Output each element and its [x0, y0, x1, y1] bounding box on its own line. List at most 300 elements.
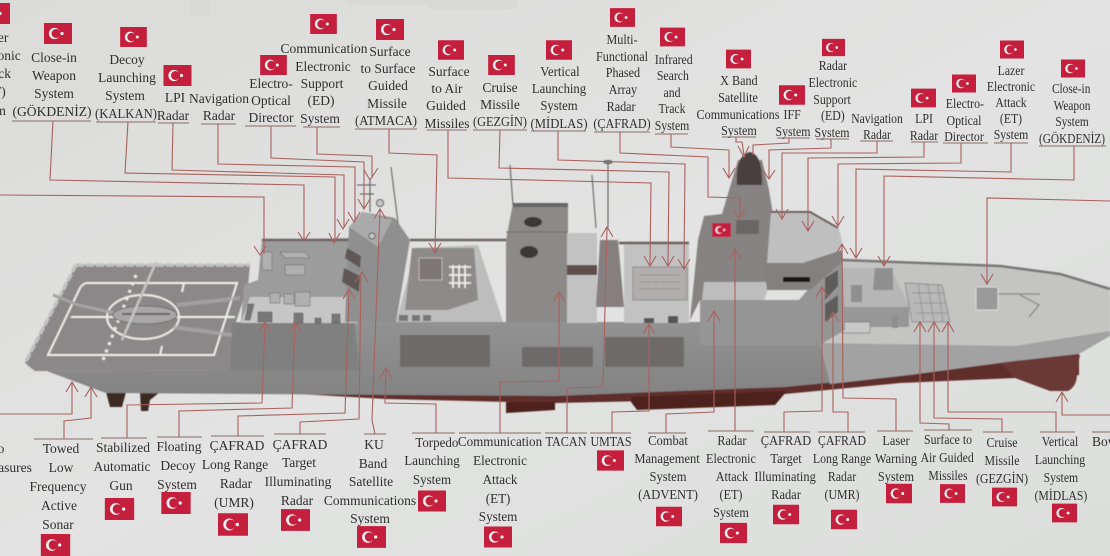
- underline: [211, 435, 264, 437]
- callout: left lazer electronic attack: [0, 3, 266, 255]
- label: Weapon: [1054, 98, 1091, 113]
- main hull: [25, 290, 1110, 396]
- label: Electro-: [946, 96, 984, 111]
- callout: bow sonar: [1056, 392, 1110, 449]
- flag: [911, 89, 936, 107]
- label: Navigation: [851, 111, 903, 126]
- label: Long Range: [813, 451, 872, 466]
- connector: [50, 121, 310, 241]
- label: LPI: [165, 90, 186, 105]
- underline: [994, 142, 1028, 144]
- top page shadow: [190, 0, 517, 16]
- label: Missile: [985, 453, 1020, 468]
- label: Radar: [607, 99, 636, 114]
- underline: [648, 432, 686, 434]
- label: Functional: [596, 49, 648, 64]
- label: Radar: [717, 433, 747, 448]
- label: Stabilized: [96, 440, 150, 455]
- callout: infrared search and track: [655, 28, 735, 178]
- hull boot band: [300, 352, 1079, 403]
- label: System: [157, 477, 197, 492]
- label: Surface to: [924, 432, 972, 447]
- label: (ET): [486, 491, 510, 506]
- label: Director: [249, 110, 294, 125]
- label: Satellite: [718, 90, 758, 105]
- label: Attack: [483, 472, 518, 487]
- connector: [380, 368, 436, 433]
- underline: [860, 140, 893, 142]
- flag: [164, 65, 192, 86]
- callout: close-in weapon: [12, 23, 310, 241]
- underline: [877, 430, 913, 432]
- flag: [831, 510, 857, 529]
- flag: [310, 14, 337, 34]
- hull flag: [712, 223, 731, 237]
- connector: [499, 130, 674, 266]
- flag: [656, 507, 682, 526]
- underline: [983, 431, 1013, 433]
- underline: [101, 437, 147, 439]
- hull side panels: [400, 335, 684, 367]
- connector: [914, 322, 949, 430]
- hangar-top equipment: [262, 252, 310, 306]
- aft vls deck: [624, 243, 689, 323]
- underline: [722, 136, 756, 138]
- underline: [355, 128, 417, 130]
- connector: [784, 287, 828, 432]
- flag: [1000, 40, 1024, 58]
- aft mast block: [345, 212, 410, 322]
- funnel block: [506, 203, 568, 322]
- label: Long Range: [202, 457, 268, 472]
- connector: [218, 124, 360, 222]
- midship mast structure: [596, 240, 624, 307]
- illustration: frigate: [25, 152, 1110, 413]
- connector: [928, 322, 1002, 432]
- label: Attack: [995, 95, 1027, 110]
- label: Air Guided: [921, 450, 974, 465]
- label: Radar: [281, 493, 314, 508]
- callout: vertical launching system: [530, 40, 690, 269]
- label: (KALKAN): [95, 106, 157, 121]
- underline: [427, 129, 467, 131]
- callout: decoy launching: [95, 27, 340, 243]
- flag: [218, 513, 248, 536]
- label: System: [1055, 114, 1089, 129]
- callout: electro-optical director: [245, 55, 370, 209]
- callout: cafrad target illuminating radar right: [754, 287, 828, 524]
- label: Close-in: [31, 50, 77, 65]
- label: System: [1044, 470, 1078, 485]
- label: Close-in: [1052, 81, 1091, 96]
- bow flank: [820, 331, 1110, 384]
- label: System: [479, 509, 518, 524]
- label: Launching: [1035, 452, 1086, 467]
- tower panel: [736, 220, 759, 234]
- label: Communications: [324, 493, 416, 508]
- label: Sonar: [42, 517, 74, 532]
- flag: [822, 39, 845, 56]
- underline: [12, 120, 91, 122]
- underline: [412, 432, 455, 434]
- underline: [459, 432, 541, 434]
- label: System: [776, 124, 811, 139]
- flag: [720, 523, 747, 543]
- bow deck: [820, 260, 1110, 346]
- callout: communication electronic attack: [458, 292, 565, 548]
- connector: [317, 127, 378, 180]
- connector: [763, 139, 831, 179]
- label: (ED): [308, 93, 334, 108]
- label: Support: [301, 76, 344, 91]
- connector: [300, 272, 368, 434]
- stern fittings below hull: [106, 392, 160, 411]
- connector: [776, 141, 877, 219]
- label: Gun: [109, 478, 133, 493]
- label: (ÇAFRAD): [593, 116, 651, 131]
- connector: [172, 123, 349, 229]
- connector: [389, 129, 441, 253]
- callout: stabilized automatic gun: [94, 322, 271, 520]
- label: System: [655, 118, 689, 133]
- underline: [473, 129, 527, 131]
- underline: [924, 429, 972, 431]
- callout: cruise missile: [473, 55, 674, 266]
- label: Cruise: [987, 435, 1018, 450]
- callout: navigation radar: [189, 91, 360, 222]
- label: Torpedo: [415, 435, 459, 450]
- callout: towed sonar: [30, 387, 97, 556]
- label: Management: [634, 451, 700, 466]
- flag: [940, 484, 965, 503]
- label: Surface: [369, 44, 411, 59]
- flag: [779, 85, 805, 105]
- callout: surface to air guided missiles: [424, 40, 656, 266]
- label: Radar: [910, 128, 939, 143]
- label: Launching: [404, 453, 460, 468]
- label: (UMR): [825, 487, 859, 502]
- flag: [0, 3, 10, 24]
- label: Infrared: [655, 52, 693, 67]
- label: System: [713, 505, 749, 520]
- flag: [376, 19, 404, 40]
- callout: tacan: [545, 227, 613, 449]
- label: Missiles: [424, 116, 470, 131]
- flag: [105, 498, 134, 520]
- connector: [127, 322, 271, 438]
- label: Combat: [648, 433, 688, 448]
- flag: [1052, 504, 1077, 522]
- label: (MİDLAS): [1034, 488, 1087, 503]
- keel skeg: [506, 391, 787, 413]
- callout: iff system: [753, 85, 811, 155]
- label: Vertical: [1042, 434, 1079, 449]
- label: (MİDLAS): [530, 116, 588, 131]
- label: Illuminating: [754, 469, 816, 484]
- bulbous bow: [1000, 355, 1080, 391]
- masts and antennas: [357, 160, 612, 239]
- connector: [238, 289, 355, 436]
- flag: [438, 40, 464, 60]
- callout: ku band satellite: [324, 209, 416, 548]
- underline: [274, 433, 326, 435]
- label: System: [105, 88, 145, 103]
- connector: [981, 198, 1110, 284]
- underline: [1092, 431, 1110, 433]
- helideck markings: [48, 275, 237, 360]
- flag: [418, 490, 446, 512]
- underline: [1039, 145, 1106, 147]
- label: Navigation: [189, 91, 249, 106]
- label: Radar: [220, 476, 253, 491]
- label: Guided: [368, 78, 408, 93]
- label: System: [721, 123, 757, 138]
- mid deck gap: [567, 233, 597, 323]
- flag: [161, 492, 191, 514]
- label: Array: [609, 82, 638, 97]
- callout: cruise missile right: [928, 322, 1028, 506]
- label: System: [413, 472, 452, 487]
- underline: [818, 431, 865, 433]
- underline: [816, 138, 849, 140]
- callout: surface to air guided missiles right: [914, 322, 974, 503]
- connector: [64, 387, 97, 439]
- underline: [594, 131, 650, 133]
- connector: [567, 227, 613, 433]
- label: Launching: [98, 70, 156, 85]
- underline: [764, 431, 810, 433]
- label: Search: [657, 68, 689, 83]
- tower dome: [737, 152, 762, 185]
- label: to Surface: [360, 61, 416, 76]
- flag: [120, 27, 147, 47]
- label: Electronic: [987, 79, 1035, 94]
- callout: radar electronic attack: [706, 249, 756, 543]
- callout: multi-functional phased array radar: [593, 8, 745, 219]
- callout: radar electronic support: [763, 39, 858, 179]
- label: ÇAFRAD: [210, 438, 265, 453]
- label: System: [34, 86, 74, 101]
- connector: [878, 146, 1074, 266]
- label: TACAN: [546, 434, 587, 449]
- flag: [726, 50, 751, 68]
- label: IFF: [784, 107, 801, 122]
- callout: right gun arrow: [981, 198, 1110, 284]
- hangar: [241, 238, 362, 322]
- label: Automatic: [94, 459, 150, 474]
- connector: [0, 195, 266, 255]
- midship deck: [396, 245, 503, 322]
- callout: umtas: [590, 324, 655, 471]
- label: Decoy: [160, 458, 196, 473]
- label: (ET): [1000, 111, 1022, 126]
- connector: [1056, 392, 1110, 415]
- label: Radar: [828, 469, 857, 484]
- connector: [802, 142, 924, 231]
- callout: lazer electronic attack: [850, 40, 1035, 258]
- connector: [736, 137, 749, 157]
- label: Towed: [43, 441, 80, 456]
- label: Decoy: [109, 52, 145, 67]
- flag: [610, 8, 635, 27]
- underline: [34, 438, 93, 440]
- bridge wing deck: [767, 212, 842, 263]
- connector: [179, 322, 301, 437]
- label: (ED): [821, 108, 845, 123]
- connector: [827, 312, 848, 432]
- label: Cruise: [482, 80, 518, 95]
- callout: navigation radar right: [776, 111, 903, 219]
- label: Support: [813, 92, 851, 107]
- label: (UMR): [214, 495, 254, 510]
- label: Launching: [532, 81, 587, 96]
- label: Electronic: [808, 75, 858, 90]
- helicopter: [53, 262, 240, 340]
- callout: close-in weapon right: [878, 60, 1106, 266]
- label: Missile: [480, 97, 520, 112]
- label: Radar: [863, 127, 892, 142]
- connector: [671, 134, 735, 178]
- label: and: [664, 85, 681, 100]
- label: Weapon: [32, 68, 76, 83]
- connector: [942, 322, 1056, 432]
- label: System: [350, 511, 390, 526]
- underline: [245, 125, 296, 127]
- flag: [773, 505, 799, 524]
- label: ÇAFRAD: [761, 433, 811, 448]
- connector: [753, 138, 789, 155]
- underline: [303, 126, 340, 128]
- connector: [666, 311, 720, 433]
- label: System: [540, 98, 578, 113]
- label: Phased: [606, 65, 641, 80]
- underline: [201, 123, 236, 125]
- flag: [357, 526, 386, 548]
- label: to Air: [431, 81, 463, 96]
- label: Optical: [947, 113, 982, 128]
- connector: [271, 126, 370, 209]
- label: (ET): [720, 487, 742, 502]
- label: Illuminating: [265, 474, 332, 489]
- label: (ATMACA): [355, 113, 417, 128]
- connector: [832, 143, 961, 226]
- forward weapon mounts: [851, 268, 898, 328]
- callout: floating decoy system: [156, 322, 301, 514]
- callout: lpi radar right: [802, 89, 939, 231]
- label: (ADVENT): [638, 487, 698, 502]
- label: System: [994, 127, 1028, 142]
- label: Surface: [428, 64, 470, 79]
- callout: surface to surface guided missile: [355, 19, 441, 253]
- label: System: [300, 111, 340, 126]
- raised foredeck: [842, 268, 909, 327]
- flag: [44, 23, 72, 44]
- label: Floating: [156, 439, 202, 454]
- underline: [364, 433, 386, 435]
- callout: communication electronic support: [280, 14, 378, 180]
- underline: [911, 141, 938, 143]
- callout: x band satellite: [697, 50, 779, 157]
- bridge front: [764, 250, 842, 290]
- connector: [612, 324, 655, 433]
- label: Optical: [251, 93, 291, 108]
- label: Lazer: [998, 63, 1025, 78]
- underline: [531, 130, 586, 132]
- connector: [500, 292, 565, 433]
- main gun: [976, 287, 1040, 317]
- underline: [545, 432, 587, 434]
- label: Target: [770, 451, 802, 466]
- label: Vertical: [540, 64, 580, 79]
- connector: [0, 382, 78, 414]
- label: Electronic: [295, 59, 351, 74]
- label: (GÖKDENİZ): [1039, 131, 1105, 146]
- underline: [777, 137, 810, 139]
- connector: [372, 209, 386, 434]
- label: KU: [364, 437, 384, 452]
- label: Director: [944, 129, 984, 144]
- label: (GÖKDENİZ): [12, 104, 92, 119]
- flag: [886, 484, 912, 503]
- label: Communications: [697, 107, 779, 122]
- callout: lpi radar: [157, 65, 349, 229]
- connector: [620, 132, 745, 219]
- label: ÇAFRAD: [818, 433, 866, 448]
- label: Laser: [882, 433, 910, 448]
- connector: [448, 130, 656, 266]
- label: Target: [282, 455, 316, 470]
- label: LPI: [915, 111, 933, 126]
- callout: electro-optical director right: [832, 74, 988, 226]
- label: Electronic: [473, 453, 527, 468]
- underline: [158, 122, 189, 124]
- underline: [590, 432, 631, 434]
- underline: [655, 133, 688, 135]
- label: Frequency: [30, 479, 87, 494]
- vertical launch cells: [905, 283, 950, 322]
- flag: [597, 450, 624, 471]
- label: Missiles: [928, 468, 968, 483]
- bridge tower: [690, 160, 777, 320]
- flag: [1061, 60, 1085, 78]
- label: Electronic: [706, 451, 756, 466]
- flag: [660, 28, 685, 46]
- label: Radar: [819, 58, 848, 73]
- label: (GEZGİN): [976, 471, 1028, 486]
- label: UMTAS: [590, 434, 632, 449]
- callout: torpedo launching: [380, 368, 460, 512]
- flag: [546, 40, 572, 60]
- flag: [488, 55, 515, 75]
- connector: [850, 143, 1011, 258]
- label: Low: [49, 460, 74, 475]
- flag: [260, 55, 287, 75]
- label: Communication: [280, 41, 368, 56]
- label: Missile: [367, 96, 407, 111]
- underline: [157, 436, 202, 438]
- label: Warning: [875, 451, 917, 466]
- label: Electro-: [249, 76, 293, 91]
- underline: [1040, 431, 1075, 433]
- label: Radar: [203, 108, 236, 123]
- label: System: [650, 469, 686, 484]
- surface to air launchers: [419, 258, 442, 280]
- callout: laser warning system: [836, 244, 917, 503]
- label: X Band: [720, 73, 758, 88]
- underline: [96, 121, 156, 123]
- label: Multi-: [606, 32, 638, 47]
- stern flight deck: [25, 265, 250, 371]
